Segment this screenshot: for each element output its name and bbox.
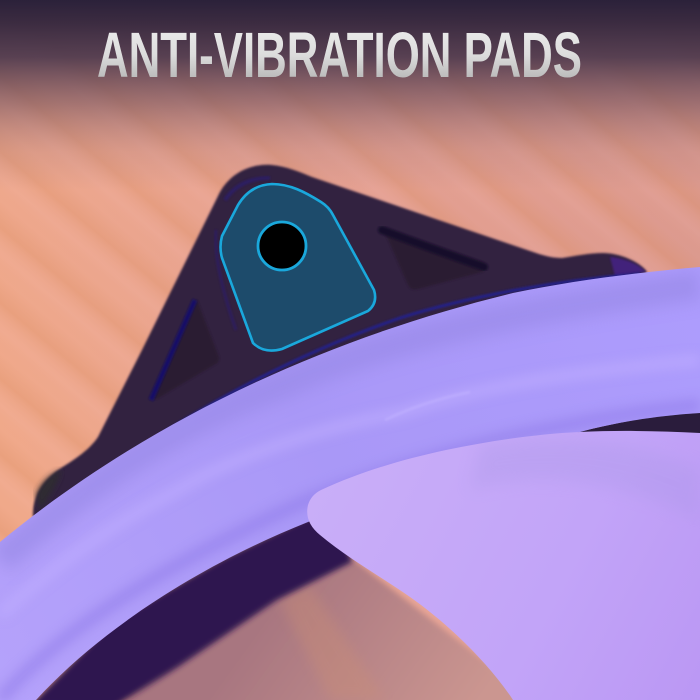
dark shadow behind ring bbox=[30, 410, 700, 700]
mounting bracket bbox=[33, 165, 647, 520]
fan blade bbox=[307, 431, 700, 700]
mounting screw hole bbox=[258, 222, 306, 270]
anti-vibration pad highlight bbox=[220, 184, 375, 351]
lower background below ring bbox=[110, 555, 560, 700]
bracket cut-out: right triangle bbox=[382, 228, 486, 290]
bracket cut-out: left triangle bbox=[151, 300, 219, 400]
fan ring bbox=[0, 260, 700, 700]
